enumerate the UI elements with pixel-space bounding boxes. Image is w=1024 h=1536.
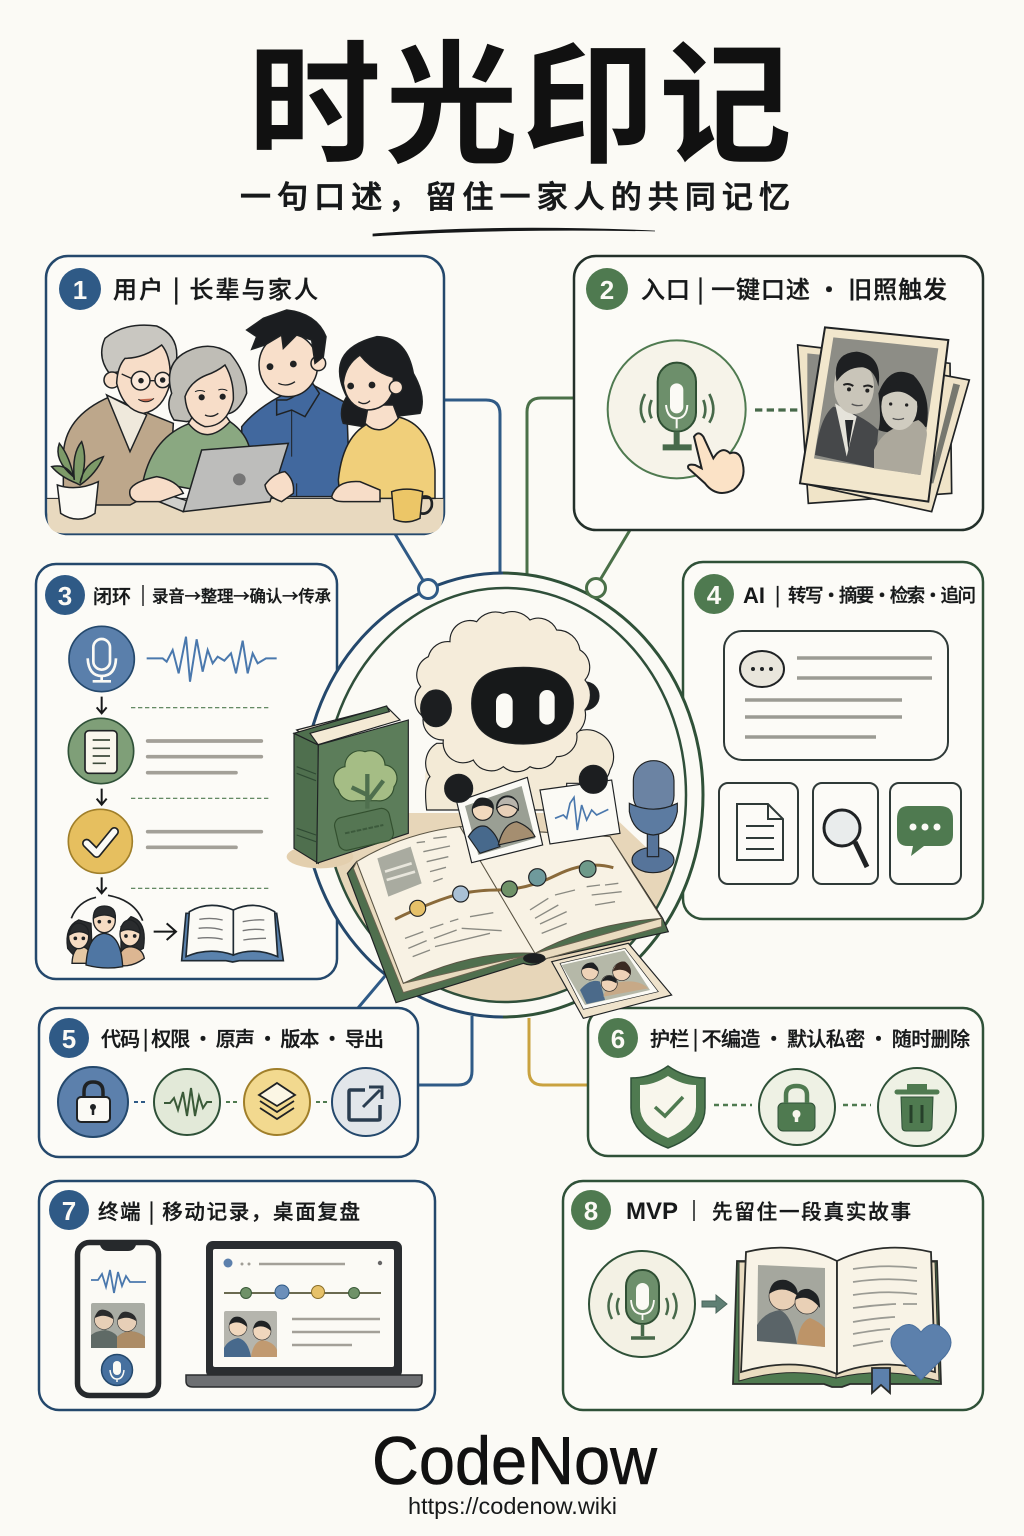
document card <box>719 783 798 884</box>
badge 8: 8 <box>584 1196 598 1226</box>
badge 5 <box>49 1018 89 1058</box>
waveform card <box>540 780 620 844</box>
phone <box>78 1242 158 1396</box>
icon dashes 2 <box>226 1101 328 1103</box>
microphone <box>629 761 677 873</box>
heading 8: 先留住一段真实故事 <box>712 1195 911 1225</box>
memory book <box>733 1248 951 1393</box>
badge 3 <box>45 575 85 615</box>
permission icon <box>58 1067 128 1137</box>
arrows between steps <box>97 697 107 893</box>
badge 2 <box>586 268 628 310</box>
badge 8 <box>571 1190 611 1230</box>
shield icon <box>631 1066 705 1148</box>
heading 1: 用户 | 长辈与家人 <box>113 270 318 305</box>
footer url: https://codenow.wiki <box>408 1493 617 1519</box>
heading 2: 入口 | 一键口述 · 旧照触发 <box>641 270 947 305</box>
title: 时光印记 <box>248 0 792 191</box>
step: confirm <box>68 809 261 873</box>
badge 5: 5 <box>62 1024 76 1054</box>
outer ring backdrop <box>303 573 703 1017</box>
ring node: users <box>418 580 438 598</box>
badge 7 <box>49 1190 89 1230</box>
panel 6: guardrails <box>588 1008 983 1156</box>
arrow to book <box>154 923 176 940</box>
badge 1: 1 <box>73 275 87 305</box>
panel 2: entry <box>574 256 983 530</box>
footer logo: CodeNow <box>372 1423 658 1499</box>
badge 6: 6 <box>611 1024 625 1054</box>
badge 4: 4 <box>707 580 722 610</box>
loose photo <box>552 943 672 1018</box>
badge 7: 7 <box>62 1196 76 1226</box>
laptop <box>186 1241 422 1387</box>
step: pass on, family <box>67 895 144 968</box>
green tree book <box>287 706 408 868</box>
outer ring: left half <box>303 573 503 1017</box>
steps column <box>67 626 283 968</box>
open book icon <box>182 905 283 962</box>
panel 5: code <box>39 1008 418 1157</box>
lock icon <box>759 1069 835 1145</box>
panel 8: MVP <box>563 1181 983 1410</box>
badge 2: 2 <box>600 275 614 305</box>
panel 4: AI <box>683 562 983 919</box>
icon dashes <box>714 1104 871 1106</box>
transcript card <box>724 631 948 760</box>
panel 1: users <box>46 256 444 534</box>
open book with timeline <box>347 827 668 1003</box>
export icon <box>332 1068 400 1136</box>
arrow to book <box>702 1295 727 1313</box>
version icon <box>244 1069 310 1135</box>
heading 5: 代码 | 权限 · 原声 · 版本 · 导出 <box>101 1023 384 1052</box>
step: organize <box>68 718 261 784</box>
family photo held by robot <box>457 777 543 863</box>
heading 4: 转写·摘要·检索·追问 <box>788 582 976 608</box>
heading 3: 录音→整理→确认→传承 <box>152 583 332 607</box>
heading 4: | <box>775 581 780 608</box>
connector lines <box>358 398 630 1085</box>
robot hands <box>445 765 607 802</box>
mic button and old photos <box>608 327 969 512</box>
heading 6: 护栏 | 不编造 · 默认私密 · 随时删除 <box>650 1023 970 1052</box>
panel 7: devices <box>39 1181 435 1410</box>
family illustration <box>47 310 443 533</box>
wooden table <box>336 813 672 1001</box>
mic circle <box>589 1251 695 1357</box>
trash icon <box>878 1068 956 1146</box>
badge 1 <box>59 268 101 310</box>
chat card <box>890 783 961 884</box>
inner ring <box>324 588 686 1002</box>
badge 4 <box>694 574 734 614</box>
badge 6 <box>598 1018 638 1058</box>
voice icon <box>154 1069 220 1135</box>
step dividers <box>131 708 270 888</box>
heading 8: MVP <box>626 1198 678 1225</box>
heading 3 <box>93 582 332 609</box>
heading 4: AI <box>743 583 765 608</box>
sheep robot <box>415 612 614 813</box>
panel 3: closed loop <box>36 564 337 979</box>
subtitle: 一句口述，留住一家人的共同记忆 <box>240 172 790 217</box>
heading 7: 终端 | 移动记录，桌面复盘 <box>98 1195 360 1225</box>
search card <box>813 783 878 884</box>
step: record <box>69 626 277 692</box>
title underline <box>373 228 655 236</box>
outer ring: right half <box>503 573 703 1017</box>
icon dashes <box>134 1101 148 1103</box>
heading 3: 闭环 <box>93 582 131 609</box>
heading 8 <box>626 1195 911 1225</box>
center illustration <box>287 612 677 1018</box>
ring node: entry <box>586 578 606 598</box>
badge 3: 3 <box>58 581 72 611</box>
